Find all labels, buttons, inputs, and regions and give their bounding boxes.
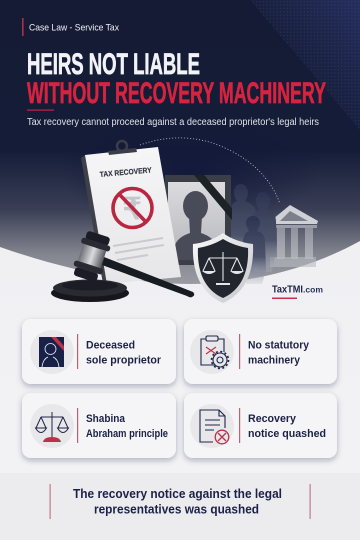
eyebrow label	[22, 18, 119, 36]
card: Shabina Abraham principle	[22, 393, 176, 458]
eyebrow label: Case Law - Service Tax	[29, 22, 119, 32]
silhouettes of heirs	[230, 184, 277, 284]
card: deceased sole proprietor	[22, 319, 176, 384]
clipboard: ₹	[122, 193, 142, 226]
temple	[270, 205, 318, 267]
light lower background	[0, 241, 360, 540]
logo: TaxTMI.com: .com	[303, 286, 323, 294]
card: no statutory machinery	[184, 319, 337, 384]
memorial portrait frame	[165, 175, 232, 265]
logo: TaxTMI.com	[272, 284, 323, 299]
conclusion strip	[0, 473, 360, 540]
title	[27, 48, 326, 110]
logo: TaxTMI.com: TaxTMI	[272, 284, 303, 296]
icon: document with cancel mark	[200, 410, 229, 444]
card: deceased sole proprietor: sole proprietor	[86, 354, 162, 366]
card: deceased sole proprietor: Deceased	[86, 340, 135, 352]
icon: portrait with ribbon	[39, 337, 64, 367]
header background	[0, 0, 360, 300]
title: HEIRS NOT LIABLE	[27, 48, 200, 81]
clipboard: TAX RECOVERY	[99, 165, 152, 179]
card: no statutory machinery: No statutory	[248, 340, 310, 352]
card: recovery notice quashed: notice quashed	[248, 428, 326, 440]
icon: balance scales	[36, 412, 68, 442]
conclusion strip: The recovery notice against the legal	[73, 487, 282, 501]
card: recovery notice quashed: Recovery	[248, 413, 297, 425]
shield with scales	[193, 233, 253, 303]
illustration	[51, 138, 318, 303]
icon: clipboard with gear	[201, 336, 228, 368]
conclusion strip: representatives was quashed	[94, 502, 259, 516]
gavel	[51, 229, 194, 302]
clipboard	[81, 141, 181, 284]
card: no statutory machinery: machinery	[248, 354, 301, 366]
dotted arc	[140, 138, 280, 204]
card: recovery notice quashed	[184, 393, 337, 458]
subtitle: Tax recovery cannot proceed against a deceased proprietor's legal heirs	[27, 117, 319, 128]
card: Shabina Abraham principle: Abraham principle	[86, 428, 168, 440]
card: Shabina Abraham principle: Shabina	[86, 413, 126, 425]
